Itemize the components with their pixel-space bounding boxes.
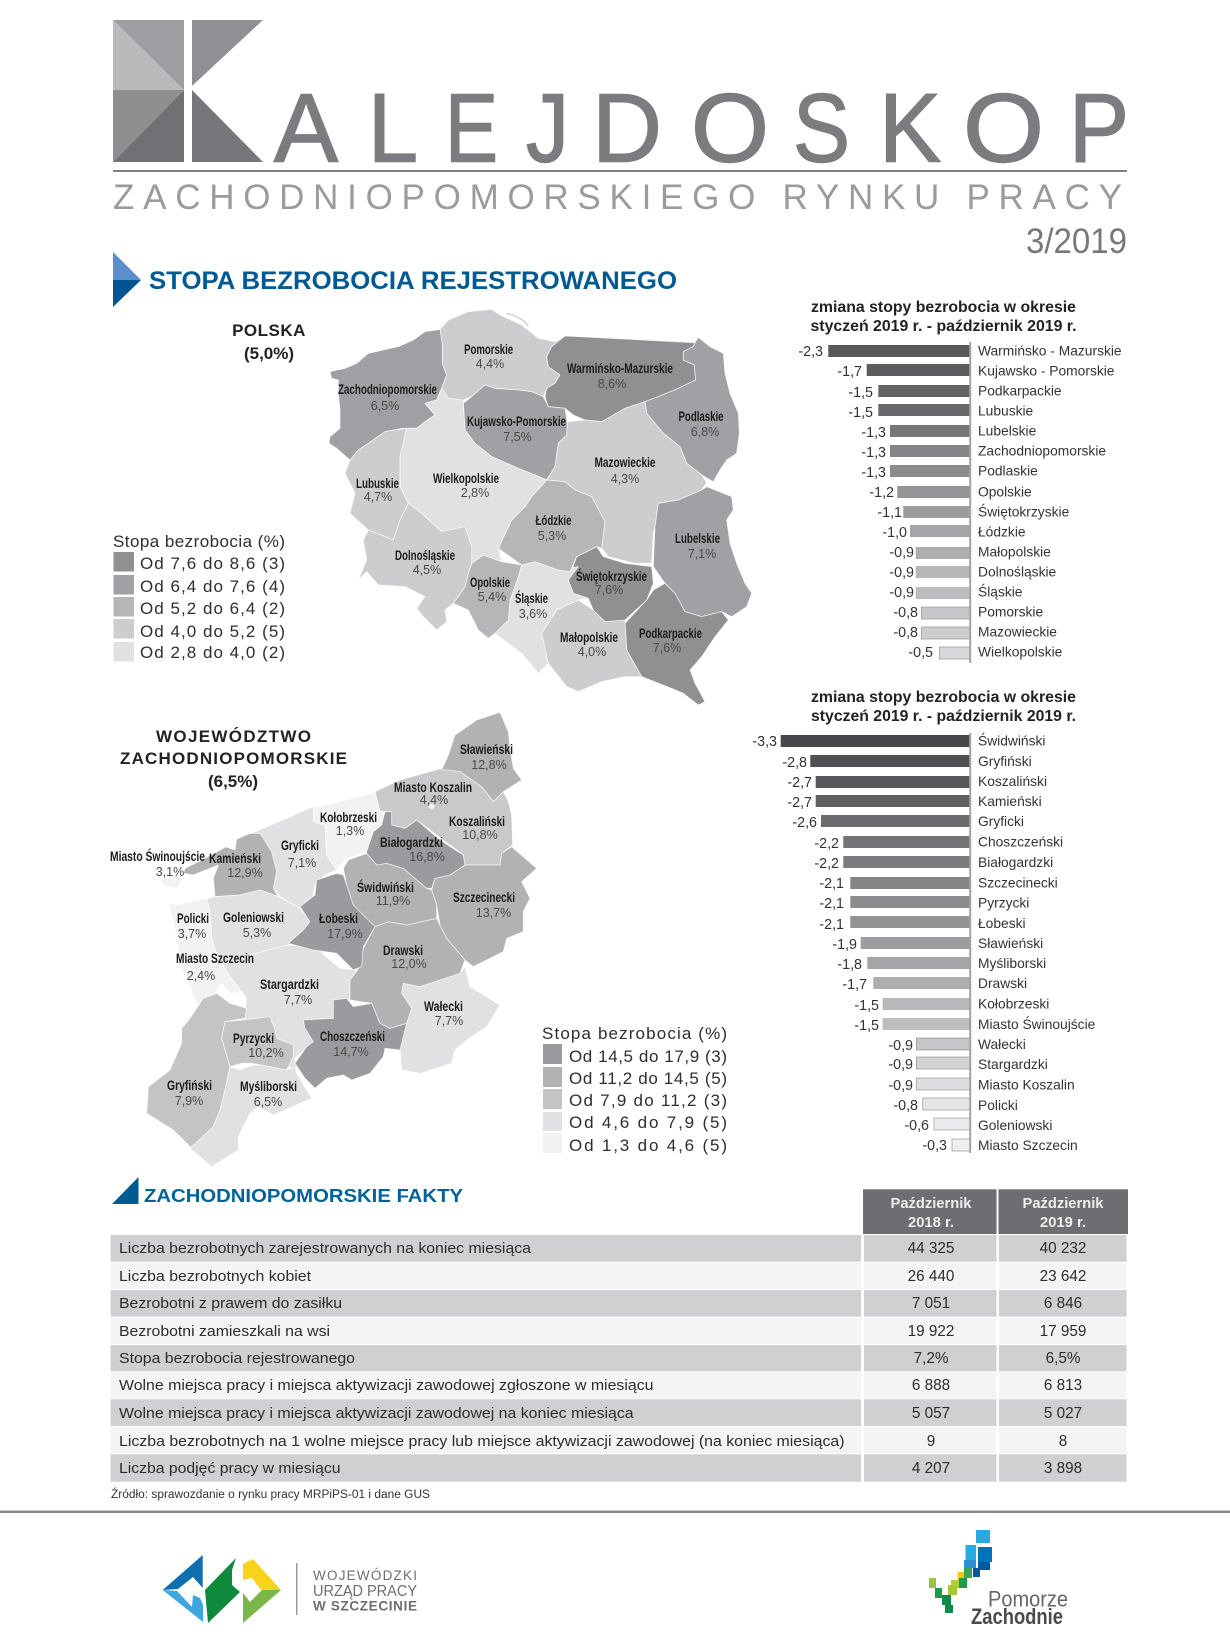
map labels: counties: 3,1% — [156, 865, 184, 879]
table rows: 44 325 — [908, 1240, 954, 1257]
title: Kalejdoskop: E — [445, 73, 498, 182]
logo text: Zachodnie — [971, 1604, 1063, 1629]
legend: counties: Od 14,5 do 17,9 (3) — [569, 1047, 727, 1066]
chart title: zmiana stopy bezrobocia w okresie — [811, 689, 1076, 706]
map labels: counties — [110, 741, 515, 1109]
chart title — [811, 689, 1076, 725]
legend: counties: Od 11,2 do 14,5 (5) — [569, 1069, 727, 1088]
source note: Źródło: sprawozdanie o rynku pracy MRPiPS-01 i dane GUS — [111, 1488, 430, 1501]
map labels: Poland: 7,5% — [503, 430, 532, 444]
bar names: Pyrzycki — [978, 895, 1029, 910]
title: Kalejdoskop: P — [1069, 73, 1129, 182]
chart title — [810, 299, 1076, 335]
bar names: Łódzkie — [978, 524, 1026, 539]
table rows: 5 027 — [1044, 1405, 1082, 1422]
subtitle: ZACHODNIOPOMORSKIEGO RYNKU PRACY — [113, 178, 1122, 217]
title: Kalejdoskop: J — [526, 73, 569, 182]
table rows: Liczba podjęć pracy w miesiącu — [119, 1460, 340, 1477]
legend: counties: Od 4,6 do 7,9 (5) — [569, 1113, 727, 1132]
table header: Październik — [890, 1196, 972, 1212]
table rows: Wolne miejsca pracy i miejsca aktywizacji zawodowej na koniec miesiąca — [119, 1405, 634, 1422]
title: Kalejdoskop: A — [274, 73, 338, 182]
bar values: -0,6 — [904, 1118, 929, 1134]
logo text — [971, 1587, 1068, 1629]
legend: Poland: Od 2,8 do 4,0 (2) — [140, 643, 285, 662]
map labels: Poland: Podlaskie — [678, 408, 724, 424]
table rows: 23 642 — [1040, 1268, 1086, 1285]
icon: tile check mark — [929, 1530, 992, 1613]
bar names: Wielkopolskie — [978, 644, 1063, 659]
logo text: WOJEWÓDZKI — [313, 1568, 417, 1583]
map labels: Poland: 5,3% — [538, 529, 566, 543]
bar names: Warmińsko - Mazurskie — [978, 344, 1122, 359]
table rows: Liczba bezrobotnych kobiet — [119, 1268, 312, 1285]
map labels: Poland: Lubuskie — [356, 475, 399, 491]
heading: Województwo: (6,5%) — [208, 772, 258, 791]
map labels: Poland: Lubelskie — [675, 530, 720, 546]
bar names: Stargardzki — [978, 1057, 1048, 1072]
map labels: Poland: Śląskie — [515, 589, 548, 606]
bar names: Miasto Świnoujście — [978, 1015, 1096, 1032]
bar names: Drawski — [978, 976, 1027, 991]
bar values: -1,5 — [854, 998, 879, 1014]
bar names: Lubuskie — [978, 403, 1034, 418]
table rows: Bezrobotni z prawem do zasiłku — [119, 1295, 342, 1312]
bars — [781, 733, 971, 1153]
map labels: counties: 11,9% — [376, 894, 410, 908]
table header: 2018 r. — [908, 1215, 954, 1231]
bar names: Gryficki — [978, 814, 1024, 829]
table rows: 9 — [927, 1433, 935, 1450]
map labels: counties: Miasto Świnoujście — [110, 847, 205, 864]
map labels: counties: Koszaliński — [449, 813, 505, 829]
title: Kalejdoskop: L — [368, 73, 418, 182]
panel: Zachodniopomorskie map — [110, 712, 727, 1167]
bar values: -2,1 — [819, 896, 844, 912]
map labels: counties: Świdwiński — [357, 878, 414, 895]
bar names: Podkarpackie — [978, 383, 1062, 398]
issue number: 3/2019 — [1026, 222, 1127, 261]
bar values: -2,2 — [814, 856, 839, 872]
bar values: -1,8 — [837, 957, 862, 973]
map labels: Poland: Wielkopolskie — [433, 470, 499, 486]
bar values — [798, 344, 933, 661]
table rows: Stopa bezrobocia rejestrowanego — [119, 1350, 355, 1367]
map labels: Poland: 6,5% — [371, 399, 399, 413]
map labels: Poland: 4,7% — [364, 490, 392, 504]
icon: WUP mark — [163, 1555, 281, 1623]
map labels: Poland: 4,0% — [578, 645, 606, 659]
legend: Poland: Od 6,4 do 7,6 (4) — [140, 577, 285, 596]
choropleth: voivodeships — [329, 309, 752, 705]
map labels: counties: Stargardzki — [260, 976, 319, 992]
heading: Polska: (5,0%) — [244, 344, 294, 363]
bar names: Świętokrzyskie — [978, 502, 1070, 519]
title: Kalejdoskop: D — [592, 73, 662, 182]
bar chart: counties change — [752, 689, 1096, 1154]
section heading: facts — [112, 1177, 464, 1206]
bar names: Opolskie — [978, 484, 1032, 499]
map labels: counties: Białogardzki — [380, 834, 443, 850]
map labels: counties: Wałecki — [424, 998, 463, 1014]
table rows: 26 440 — [908, 1268, 954, 1285]
bar names: Podlaskie — [978, 463, 1038, 478]
table header — [863, 1189, 1128, 1234]
heading: Polska — [232, 321, 306, 363]
bar names: Goleniowski — [978, 1118, 1052, 1133]
bar names: Łobeski — [978, 916, 1026, 931]
table rows: 4 207 — [912, 1460, 950, 1477]
table rows: Bezrobotni zamieszkali na wsi — [119, 1323, 330, 1340]
map labels: Poland: 7,6% — [653, 641, 681, 655]
map labels: counties: Myśliborski — [240, 1078, 297, 1094]
bar values — [752, 734, 947, 1154]
logo: WUP Szczecin — [163, 1555, 417, 1623]
bar names: Zachodniopomorskie — [978, 443, 1106, 458]
map labels: counties: Sławieński — [460, 741, 513, 757]
legend: counties: Stopa bezrobocia (%) — [542, 1024, 727, 1043]
map labels: Poland: Mazowieckie — [594, 454, 656, 470]
map labels: Poland: 8,6% — [598, 377, 626, 391]
title: Kalejdoskop: S — [793, 73, 850, 182]
map labels: counties: Choszczeński — [320, 1028, 385, 1044]
table header: 2019 r. — [1040, 1215, 1086, 1231]
bar values: -0,8 — [893, 605, 918, 621]
bar names: Dolnośląskie — [978, 564, 1057, 579]
map labels: Poland: Zachodniopomorskie — [338, 381, 437, 397]
table header: Październik — [1022, 1196, 1104, 1212]
bar names: Świdwiński — [978, 732, 1045, 749]
map labels: counties: 17,9% — [327, 927, 363, 941]
logo: Pomorze Zachodnie — [929, 1530, 1068, 1629]
map labels: counties: Goleniowski — [223, 909, 284, 925]
bar values: -2,3 — [798, 344, 823, 360]
bar names: Lubelskie — [978, 423, 1037, 438]
map labels: counties: 1,3% — [336, 824, 364, 838]
table rows: 6 846 — [1044, 1295, 1082, 1312]
map labels: counties: Kamieński — [209, 850, 261, 866]
table rows — [111, 1235, 1127, 1482]
bar names: Koszaliński — [978, 774, 1047, 789]
bar values: -0,3 — [922, 1138, 947, 1154]
map labels: Poland: Dolnośląskie — [395, 547, 455, 563]
map labels: Poland: Opolskie — [470, 574, 510, 590]
table rows: 5 057 — [912, 1405, 950, 1422]
bar names: Sławieński — [978, 936, 1043, 951]
map labels: counties: 16,8% — [409, 850, 445, 864]
bar names: Kujawsko - Pomorskie — [978, 363, 1115, 378]
bar names: Wałecki — [978, 1037, 1026, 1052]
bar values: -0,8 — [893, 625, 918, 641]
table rows: Wolne miejsca pracy i miejsca aktywizacji zawodowej zgłoszone w miesiącu — [119, 1377, 654, 1394]
bar values: -1,9 — [832, 937, 857, 953]
table rows: 40 232 — [1040, 1240, 1086, 1257]
map labels: counties: Miasto Koszalin — [394, 779, 472, 795]
legend: counties — [542, 1024, 727, 1155]
bars — [828, 342, 971, 663]
bar values: -0,9 — [888, 1078, 913, 1094]
bar values: -0,8 — [893, 1098, 918, 1114]
section heading: unemployment rate — [113, 252, 677, 307]
map labels: counties: 4,4% — [420, 793, 448, 807]
table rows: 3 898 — [1044, 1460, 1082, 1477]
map labels: counties: 5,3% — [243, 926, 271, 940]
bar values: -0,9 — [889, 585, 914, 601]
map labels: Poland: 4,5% — [413, 563, 441, 577]
map labels: counties: Drawski — [383, 942, 423, 958]
bar names: Mazowieckie — [978, 624, 1057, 639]
bar values: -1,1 — [877, 505, 902, 521]
table rows: 19 922 — [908, 1323, 954, 1340]
table rows: Liczba bezrobotnych zarejestrowanych na koniec miesiąca — [119, 1240, 532, 1257]
map labels: Poland: Łódzkie — [536, 512, 572, 528]
bar values: -1,5 — [848, 405, 873, 421]
bar values: -1,0 — [882, 525, 907, 541]
section heading: facts: ZACHODNIOPOMORSKIE FAKTY — [144, 1185, 464, 1206]
heading: Polska: POLSKA — [232, 321, 306, 340]
bar values: -2,2 — [814, 836, 839, 852]
map labels: counties: 10,8% — [462, 828, 498, 842]
map labels: counties: Miasto Szczecin — [176, 950, 254, 966]
map labels: counties: 7,9% — [175, 1094, 203, 1108]
bar names: Choszczeński — [978, 835, 1063, 850]
bar names — [978, 344, 1122, 659]
panel: Poland map — [113, 309, 752, 705]
map labels: Poland: 7,6% — [595, 583, 623, 597]
table rows: 6 813 — [1044, 1377, 1082, 1394]
legend: Poland: Od 7,6 do 8,6 (3) — [140, 554, 285, 573]
map labels: Poland: 7,1% — [688, 547, 716, 561]
map labels: counties: 12,9% — [227, 866, 263, 880]
bar names: Miasto Szczecin — [978, 1138, 1078, 1153]
bar names — [978, 732, 1096, 1153]
bar names: Gryfiński — [978, 754, 1032, 769]
bar values: -1,3 — [861, 445, 886, 461]
logo text: Pomorze — [988, 1587, 1068, 1612]
chart title: zmiana stopy bezrobocia w okresie — [811, 299, 1076, 316]
bar values: -1,3 — [861, 465, 886, 481]
map labels: counties: 7,1% — [288, 856, 316, 870]
map labels: counties: Policki — [177, 910, 209, 926]
table rows: 7,2% — [914, 1350, 949, 1367]
bar values: -2,1 — [819, 917, 844, 933]
map labels: Poland — [338, 341, 724, 659]
bar values: -1,2 — [869, 485, 894, 501]
map labels: counties: Łobeski — [319, 910, 358, 926]
choropleth: counties — [147, 712, 537, 1167]
logo text: URZĄD PRACY — [313, 1583, 417, 1600]
heading: Województwo — [120, 727, 347, 791]
heading: Województwo: ZACHODNIOPOMORSKIE — [120, 749, 347, 768]
map labels: Poland: 4,3% — [611, 472, 639, 486]
bar names: Szczecinecki — [978, 875, 1058, 890]
map labels: counties: Gryficki — [281, 837, 319, 853]
map labels: Poland: 3,6% — [519, 607, 547, 621]
table rows: Liczba bezrobotnych na 1 wolne miejsce pracy lub miejsce aktywizacji zawodowej (na koniec miesiąca) — [119, 1433, 845, 1450]
bar names: Pomorskie — [978, 604, 1043, 619]
map labels: counties: 2,4% — [187, 969, 215, 983]
legend: Poland: Od 4,0 do 5,2 (5) — [140, 622, 285, 641]
bar values: -2,7 — [787, 775, 812, 791]
map labels: counties: 6,5% — [254, 1095, 282, 1109]
title: Kalejdoskop: K — [879, 73, 941, 182]
map labels: Poland: 6,8% — [691, 425, 719, 439]
map labels: counties: Pyrzycki — [233, 1030, 274, 1046]
map labels: counties: 10,2% — [248, 1046, 284, 1060]
table: facts — [111, 1189, 1128, 1482]
map labels: Poland: 5,4% — [478, 590, 506, 604]
map labels: counties: Szczecinecki — [453, 889, 515, 905]
chart title: styczeń 2019 r. - październik 2019 r. — [811, 708, 1076, 725]
bar values: -2,8 — [782, 755, 807, 771]
bar names: Miasto Koszalin — [978, 1078, 1075, 1093]
legend: Poland — [113, 532, 285, 662]
map labels: counties: Kołobrzeski — [320, 809, 377, 825]
map labels: counties: Gryfiński — [167, 1077, 212, 1093]
bar values: -2,6 — [792, 815, 817, 831]
bar values: -3,3 — [752, 734, 777, 750]
bar values: -2,7 — [787, 795, 812, 811]
map labels: Poland: Małopolskie — [560, 629, 618, 645]
map labels: Poland: 2,8% — [461, 486, 489, 500]
bar values: -2,1 — [819, 876, 844, 892]
bar names: Białogardzki — [978, 855, 1053, 870]
bar values: -1,3 — [861, 425, 886, 441]
masthead — [113, 20, 1129, 261]
table rows: 6 888 — [912, 1377, 950, 1394]
logo text — [313, 1568, 417, 1614]
chart title: styczeń 2019 r. - październik 2019 r. — [810, 318, 1076, 335]
bar values: -1,7 — [837, 364, 862, 380]
map labels: Poland: Kujawsko-Pomorskie — [467, 413, 566, 429]
map labels: counties: 7,7% — [435, 1014, 463, 1028]
map labels: counties: 14,7% — [333, 1045, 369, 1059]
bar names: Małopolskie — [978, 544, 1051, 559]
bar values: -0,5 — [908, 645, 933, 661]
title: Kalejdoskop — [274, 73, 1129, 182]
bar chart: voivodeships change — [798, 299, 1122, 663]
bar values: -0,9 — [889, 565, 914, 581]
bar names: Kołobrzeski — [978, 997, 1049, 1012]
bar names: Kamieński — [978, 794, 1042, 809]
map labels: counties: 13,7% — [476, 906, 511, 920]
table rows: 17 959 — [1040, 1323, 1086, 1340]
logo text: W SZCZECINIE — [313, 1599, 417, 1614]
map labels: Poland: Świętokrzyskie — [576, 567, 647, 584]
bar values: -1,5 — [848, 385, 873, 401]
section heading: unemployment rate: STOPA BEZROBOCIA REJESTROWANEGO — [149, 267, 677, 295]
map labels: counties: 7,7% — [284, 993, 312, 1007]
icon: kaleidoscope K — [113, 20, 263, 162]
bar names: Śląskie — [978, 582, 1023, 599]
table rows: 8 — [1059, 1433, 1067, 1450]
bar values: -0,9 — [888, 1057, 913, 1073]
legend: Poland: Od 5,2 do 6,4 (2) — [140, 599, 285, 618]
heading: Województwo: WOJEWÓDZTWO — [156, 727, 311, 746]
bar names: Policki — [978, 1098, 1018, 1113]
bar values: -1,5 — [854, 1018, 879, 1034]
map labels: counties: 12,0% — [391, 957, 427, 971]
map labels: Poland: Podkarpackie — [639, 625, 702, 641]
table rows: 7 051 — [912, 1295, 950, 1312]
map labels: Poland: 4,4% — [476, 357, 504, 371]
bar values: -1,7 — [842, 977, 867, 993]
map labels: counties: 3,7% — [178, 927, 206, 941]
title: Kalejdoskop: O — [963, 73, 1044, 182]
map labels: counties: 12,8% — [471, 758, 507, 772]
legend: counties: Od 7,9 do 11,2 (3) — [569, 1091, 727, 1110]
legend: counties: Od 1,3 do 4,6 (5) — [569, 1136, 727, 1155]
table rows: 6,5% — [1046, 1350, 1081, 1367]
legend: Poland: Stopa bezrobocia (%) — [113, 532, 285, 551]
map labels: Poland: Warmińsko-Mazurskie — [567, 360, 673, 376]
bar names: Myśliborski — [978, 956, 1046, 971]
map labels: Poland: Pomorskie — [464, 341, 513, 357]
bar values: -0,9 — [888, 1038, 913, 1054]
bar values: -0,9 — [889, 545, 914, 561]
title: Kalejdoskop: O — [691, 73, 769, 182]
